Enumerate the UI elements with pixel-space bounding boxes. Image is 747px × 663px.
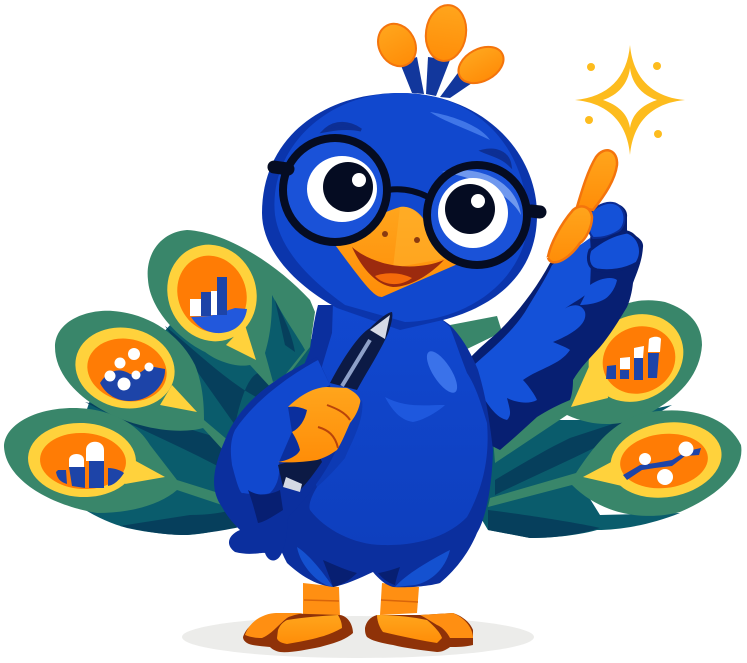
green patch behind neck — [450, 316, 502, 350]
feather: middle left with scatter chart — [55, 311, 230, 450]
right wing raised with hand — [460, 150, 643, 450]
left fan dark streaks — [85, 326, 290, 535]
right fan dark streak — [488, 415, 640, 538]
feather: top right with bar chart — [490, 297, 702, 463]
left wing — [214, 357, 340, 560]
right feather fan underlay — [470, 405, 680, 538]
fingers: orange feather tips — [548, 150, 617, 262]
legs and feet — [243, 583, 473, 652]
face: eyes and glasses — [274, 138, 540, 265]
left feather fan underlay — [60, 325, 320, 535]
pen — [278, 312, 392, 492]
hand holding pen — [278, 387, 360, 462]
feather: top left with bar chart — [148, 230, 315, 390]
head — [262, 93, 537, 330]
crest: three orange-tipped plumes — [371, 2, 510, 98]
feather: bottom left with bar chart — [4, 408, 225, 513]
feather: bottom right with line chart — [488, 410, 741, 516]
body — [273, 303, 493, 587]
beak with smile — [333, 207, 460, 297]
ground shadow — [182, 616, 534, 658]
sparkle star — [575, 45, 685, 155]
